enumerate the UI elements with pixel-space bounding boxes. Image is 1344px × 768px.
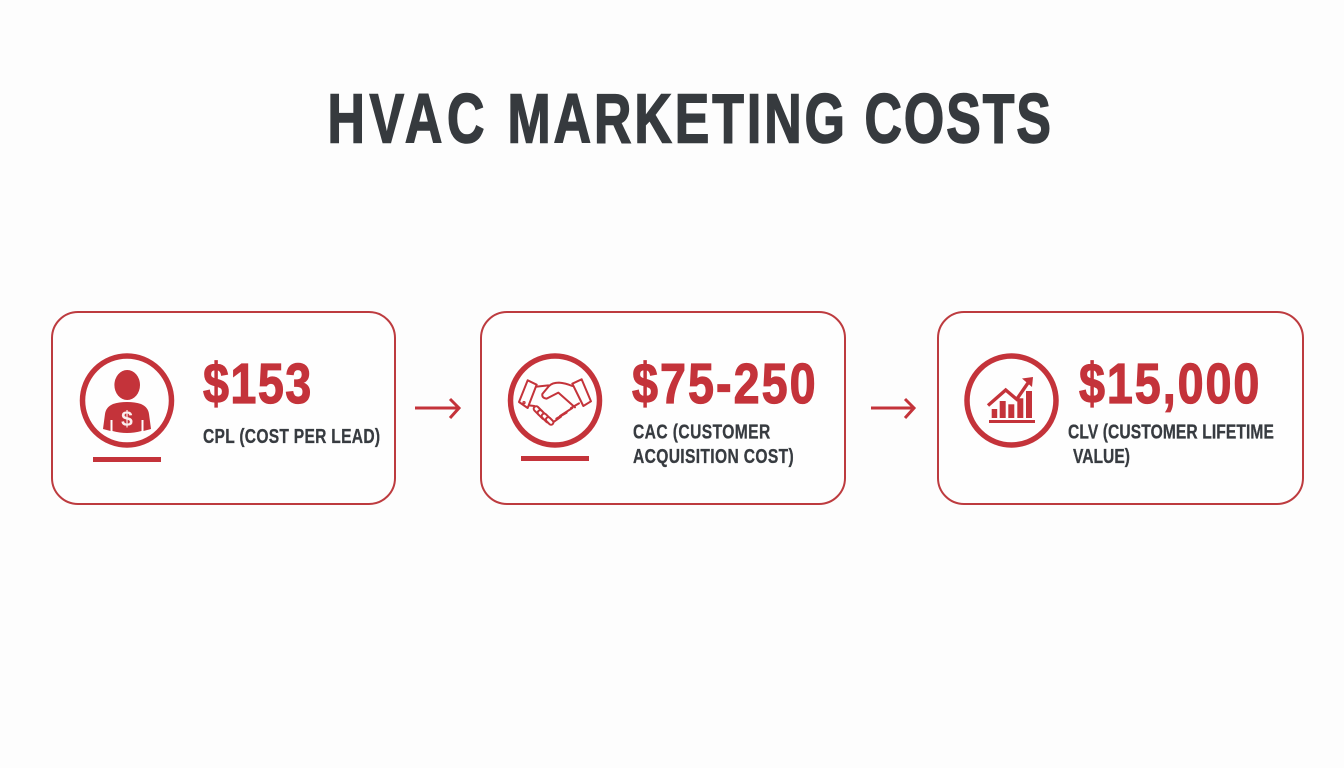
title: [328, 80, 1051, 158]
label: CLV (CUSTOMER LIFETIME: [1068, 421, 1274, 443]
label: ACQUISITION COST): [633, 445, 794, 467]
panel: CAC: [481, 312, 845, 504]
icon: person with dollar sign: $: [121, 408, 133, 431]
underline: [521, 456, 589, 461]
panel: CLV: [938, 312, 1303, 504]
title: MARKETING: [508, 80, 845, 158]
label: CPL (COST PER LEAD): [203, 425, 380, 447]
panel: CPL: [52, 312, 395, 504]
icon: handshake: [510, 356, 600, 445]
icon: growth chart: [967, 356, 1056, 445]
icon: person with dollar sign: [82, 356, 172, 445]
value: $153: [203, 353, 311, 416]
arrow: [415, 399, 459, 418]
label: VALUE): [1073, 445, 1130, 467]
label: CAC (CUSTOMER: [633, 421, 770, 443]
label: [1068, 421, 1274, 467]
title: COSTS: [864, 80, 1051, 158]
value: $75-250: [632, 353, 816, 416]
value: $15,000: [1079, 353, 1259, 416]
title: HVAC: [328, 80, 484, 158]
underline: [93, 457, 161, 462]
arrow: [871, 399, 914, 418]
label: [633, 421, 794, 467]
